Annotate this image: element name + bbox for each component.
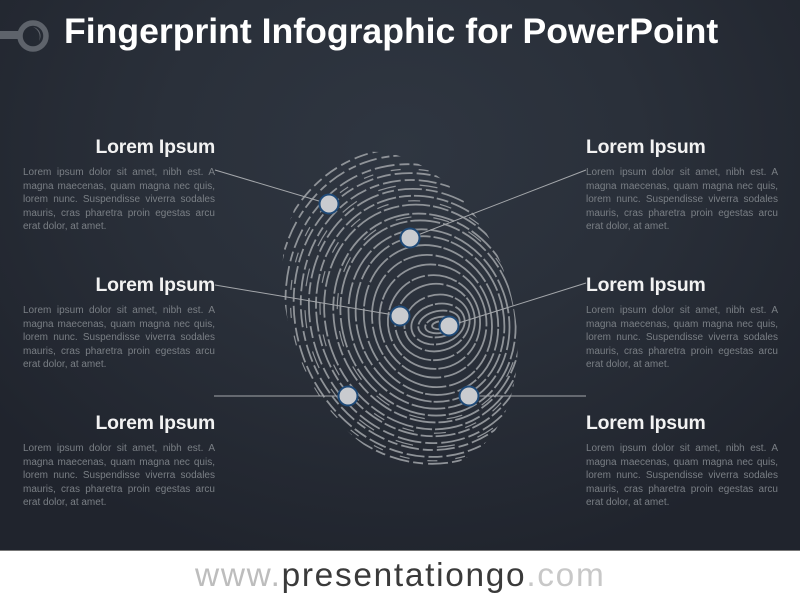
text: left 3: lorem nunc. Suspendisse viverra sodales	[23, 470, 215, 481]
fingerprint ridges	[282, 152, 518, 465]
text: right 2: Lorem ipsum dolor sit amet, nibh est. A	[586, 305, 778, 316]
text: right 2: mauris, cras pharetra proin egestas arcu	[586, 346, 778, 356]
text: right 3: magna maecenas, quam magna nec quis,	[586, 456, 778, 468]
text: right 3: mauris, cras pharetra proin egestas arcu	[586, 484, 778, 494]
text: left 3	[23, 443, 215, 508]
text: left 2: erat dolor, at amet.	[23, 359, 106, 370]
heading: left 3: Lorem Ipsum	[95, 412, 215, 434]
text: left 1: mauris, cras pharetra proin egestas arcu	[23, 208, 215, 218]
text: right 2: erat dolor, at amet.	[586, 359, 669, 370]
fingerprint diagram	[214, 152, 586, 465]
text: left 2: lorem nunc. Suspendisse viverra sodales	[23, 332, 215, 343]
text: left 1: erat dolor, at amet.	[23, 221, 106, 232]
text: left 3: Lorem ipsum dolor sit amet, nibh est. A	[23, 443, 215, 454]
text: right 1: erat dolor, at amet.	[586, 221, 669, 232]
text: right 1: Lorem ipsum dolor sit amet, nibh est. A	[586, 167, 778, 178]
text: left 2: mauris, cras pharetra proin egestas arcu	[23, 346, 215, 356]
text: right 3: Lorem ipsum dolor sit amet, nibh est. A	[586, 443, 778, 454]
heading: right 1: Lorem Ipsum	[586, 136, 706, 158]
text: left 3: erat dolor, at amet.	[23, 497, 106, 508]
text: left 2: magna maecenas, quam magna nec quis,	[23, 318, 215, 330]
icon: title ring	[0, 20, 49, 52]
heading: left 1: Lorem Ipsum	[95, 136, 215, 158]
text: left 3: magna maecenas, quam magna nec quis,	[23, 456, 215, 468]
text: left 1: magna maecenas, quam magna nec quis,	[23, 180, 215, 192]
text: left 2	[23, 305, 215, 370]
markers	[320, 194, 478, 406]
text: right 3	[586, 443, 778, 508]
text: right 1: lorem nunc. Suspendisse viverra sodales	[586, 194, 778, 205]
text: right 3: lorem nunc. Suspendisse viverra sodales	[586, 470, 778, 481]
heading: right 3: Lorem Ipsum	[586, 412, 706, 434]
title: Fingerprint Infographic for PowerPoint	[64, 11, 718, 51]
text: right 1: magna maecenas, quam magna nec quis,	[586, 180, 778, 192]
heading: left 2: Lorem Ipsum	[95, 274, 215, 296]
text: left 3: mauris, cras pharetra proin egestas arcu	[23, 484, 215, 494]
text: right 2: magna maecenas, quam magna nec quis,	[586, 318, 778, 330]
text: right 2: lorem nunc. Suspendisse viverra sodales	[586, 332, 778, 343]
text: right 2	[586, 305, 778, 370]
heading: right 2: Lorem Ipsum	[586, 274, 706, 296]
text: left 2: Lorem ipsum dolor sit amet, nibh est. A	[23, 305, 215, 316]
footer website text: www.presentationgo.com	[195, 557, 605, 594]
text: left 1: Lorem ipsum dolor sit amet, nibh est. A	[23, 167, 215, 178]
text: right 3: erat dolor, at amet.	[586, 497, 669, 508]
connector lines	[214, 170, 586, 396]
text: right 1: mauris, cras pharetra proin egestas arcu	[586, 208, 778, 218]
text: left 1	[23, 167, 215, 232]
text: right 1	[586, 167, 778, 232]
text: left 1: lorem nunc. Suspendisse viverra sodales	[23, 194, 215, 205]
